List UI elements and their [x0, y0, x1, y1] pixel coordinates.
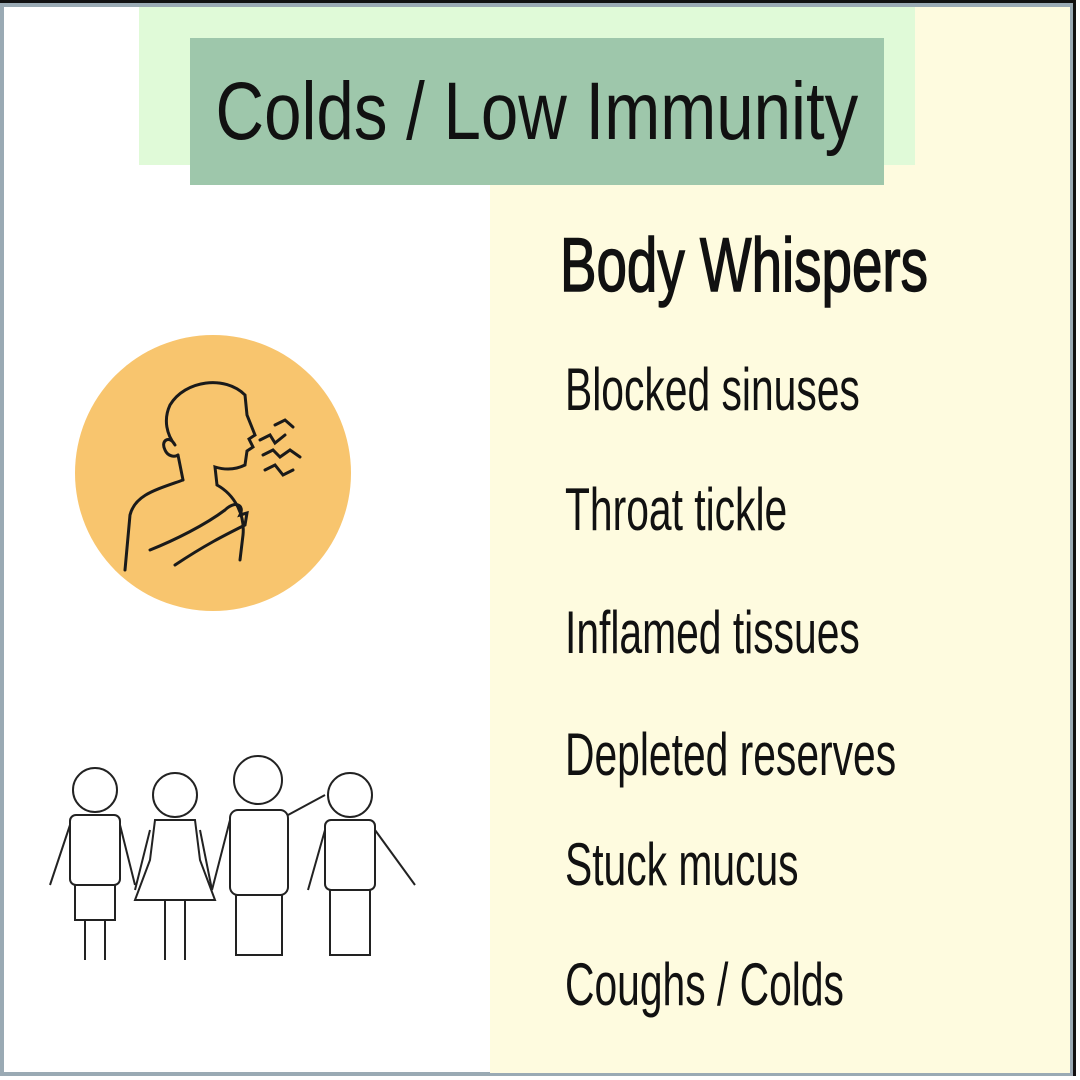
panel: yellow right [490, 7, 1070, 1073]
title: Colds / Low Immunity [216, 66, 858, 156]
symptom list: Stuck mucus [565, 831, 799, 898]
symptom list: Depleted reserves [565, 721, 896, 788]
heading: Body Whispers: Body Whispers [560, 223, 928, 308]
title [190, 38, 884, 185]
symptom list: Coughs / Colds [565, 951, 844, 1018]
symptom list: Inflamed tissues [565, 599, 860, 666]
illustration: four children [49, 755, 416, 960]
symptom list: Blocked sinuses [565, 356, 860, 423]
header band [139, 7, 915, 165]
icon: person coughing [75, 335, 351, 611]
symptom list [565, 356, 896, 1018]
symptom list: Throat tickle [565, 476, 787, 543]
